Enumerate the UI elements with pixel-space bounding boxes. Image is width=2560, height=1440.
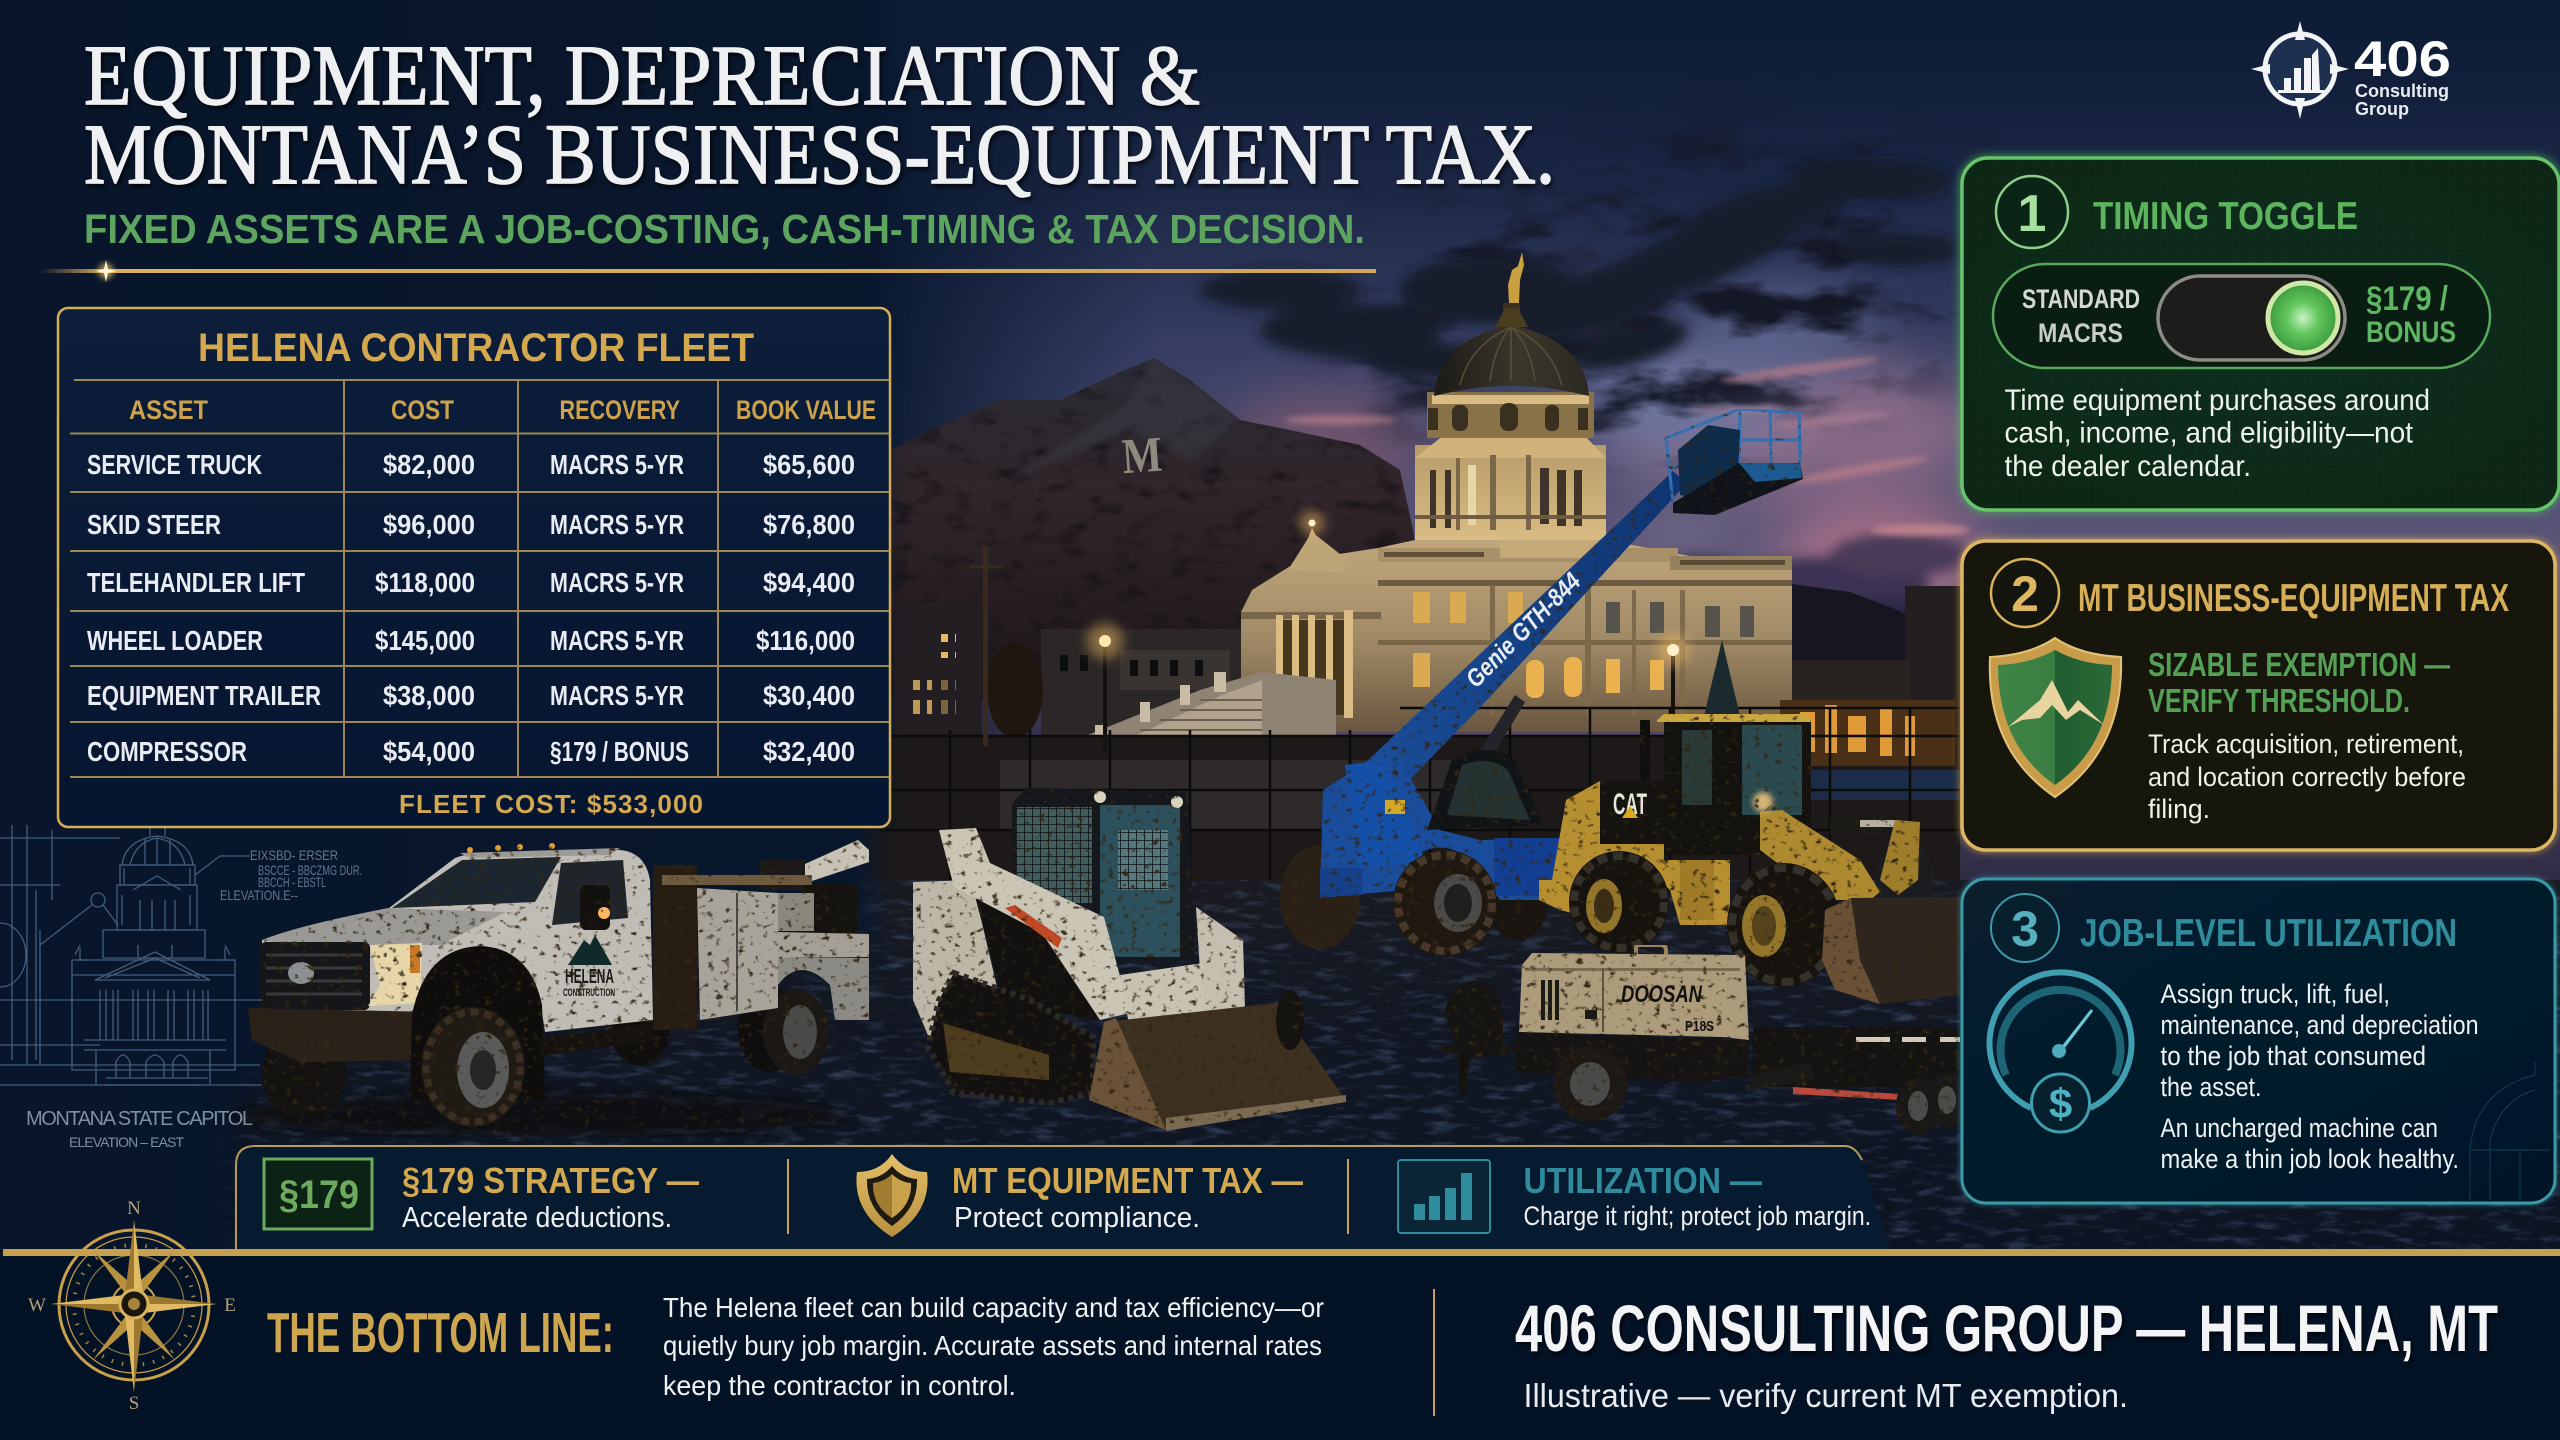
toggle control: STANDARD (2022, 284, 2140, 314)
table row: equipment trailer: EQUIPMENT TRAILER (87, 680, 321, 711)
item: MT equipment tax: Protect compliance. (954, 1202, 1200, 1234)
number badge 3: 3 (2011, 901, 2039, 957)
title (84, 27, 1555, 202)
body (1320, 757, 1560, 900)
blueprint annotations: BBCCH - EBSTL (258, 874, 326, 890)
basket (1666, 409, 1800, 503)
body text (2004, 384, 2430, 483)
table row: telehandler lift: $118,000 (375, 567, 475, 598)
body text: the dealer calendar. (2004, 450, 2251, 483)
icon: gold compass rose (28, 1198, 236, 1414)
item: MT equipment tax: MT EQUIPMENT TAX — (952, 1160, 1303, 1201)
table header row (129, 395, 876, 425)
blueprint caption: MONTANA STATE CAPITOL (26, 1108, 253, 1130)
mountains (1792, 584, 1905, 660)
handle (1636, 945, 1666, 956)
crane (785, 840, 869, 885)
logo: 406 Consulting Group (2251, 21, 2451, 119)
table row: wheel loader: MACRS 5-YR (550, 625, 684, 656)
callout: VERIFY THRESHOLD. (2148, 682, 2410, 719)
item: MT equipment tax (856, 1154, 1303, 1237)
table row: equipment trailer: $30,400 (763, 680, 855, 711)
subtitle: FIXED ASSETS ARE A JOB-COSTING, CASH-TIMING & TAX DECISION. (84, 206, 1365, 252)
heading: TIMING TOGGLE (2093, 195, 2358, 238)
rear wheels (610, 995, 670, 1065)
truck door logo: HELENA (565, 966, 614, 988)
tires (1569, 851, 1669, 953)
wet ground (200, 880, 2560, 1260)
number badge 3 (1991, 894, 2059, 962)
item: §179 strategy (264, 1159, 699, 1234)
chassis (1515, 1032, 1749, 1082)
toggle control: §179 / (2366, 280, 2448, 318)
blueprint annotations (220, 847, 362, 903)
toggle control: BONUS (2366, 316, 2456, 349)
body text: Time equipment purchases around (2004, 384, 2430, 417)
the bottom line heading: THE BOTTOM LINE: (267, 1301, 614, 1365)
table row: compressor: $54,000 (383, 736, 475, 767)
bottom line body: The Helena fleet can build capacity and tax efficiency—or (663, 1292, 1324, 1323)
body text: and location correctly before (2148, 762, 2466, 792)
body text: filing. (2148, 794, 2210, 824)
panel: Helena contractor fleet table (58, 308, 890, 827)
wheel arch (410, 946, 545, 1100)
gold rule with sparkle (40, 260, 1376, 282)
bucket (1822, 897, 1961, 1004)
table row: service truck: MACRS 5-YR (550, 449, 684, 480)
housing (1519, 953, 1749, 1040)
body text: Assign truck, lift, fuel, (2160, 979, 2390, 1009)
cab (1427, 750, 1543, 830)
406 Consulting Group sign-off: Illustrative — verify current MT exemption. (1524, 1377, 2128, 1414)
item: §179 strategy: §179 (279, 1173, 359, 1217)
front tire (421, 1007, 525, 1127)
toggle control: MACRS (2038, 318, 2123, 348)
bucket (1089, 1003, 1346, 1130)
table grid (70, 380, 890, 777)
loader arm (1760, 810, 1880, 900)
CAT logo (1613, 788, 1647, 821)
icon: mountain shield (1990, 638, 2121, 797)
toggle control (1993, 264, 2490, 368)
logo: 406 Consulting Group: 406 (2354, 31, 2451, 87)
table row: telehandler lift: MACRS 5-YR (550, 567, 684, 598)
table row: skid steer: SKID STEER (87, 509, 221, 540)
front tire (1393, 850, 1497, 956)
title: EQUIPMENT, DEPRECIATION & (84, 27, 1200, 123)
icon: gold compass rose: E (224, 1295, 236, 1316)
boom label: Genie GTH-844 (1460, 567, 1586, 693)
M on mountain: M (1120, 426, 1164, 484)
service truck (230, 840, 869, 1137)
blueprint annotations: ELEVATION.E-- (220, 887, 298, 903)
body text: maintenance, and depreciation (2160, 1010, 2478, 1040)
logo: 406 Consulting Group: Group (2355, 99, 2409, 119)
table row: wheel loader: $116,000 (756, 625, 855, 656)
body text: the asset. (2160, 1072, 2262, 1102)
table row: equipment trailer: $38,000 (383, 680, 475, 711)
lower body (1120, 963, 1205, 1030)
body text: to the job that consumed (2160, 1041, 2426, 1071)
table row: telehandler lift: TELEHANDLER LIFT (87, 567, 305, 598)
compressor and trailer (1441, 945, 1967, 1135)
inner front tire (262, 1027, 346, 1119)
table row: equipment trailer (87, 680, 855, 711)
stairs and foreground wall (860, 640, 1960, 886)
track (928, 973, 1093, 1103)
wheel loader (1539, 714, 1961, 1004)
table row: telehandler lift: $94,400 (763, 567, 855, 598)
table row: wheel loader: $145,000 (375, 625, 475, 656)
cab (1012, 788, 1195, 960)
blueprint annotations: EIXSBD- ERSER (250, 847, 338, 863)
tires (1280, 845, 1360, 949)
table header row: ASSET (129, 395, 208, 425)
street lamps and utility pole (970, 511, 1689, 753)
callout (2148, 646, 2450, 719)
logo: 406 Consulting Group: Consulting (2355, 81, 2449, 101)
table row: skid steer: $76,800 (763, 509, 855, 540)
body text (2160, 979, 2478, 1174)
body text: An uncharged machine can (2160, 1113, 2438, 1143)
callout: SIZABLE EXEMPTION — (2148, 646, 2450, 683)
table row: service truck (87, 449, 855, 480)
cab and hood (262, 850, 653, 1032)
lift arm (939, 828, 1130, 1020)
table row: wheel loader: WHEEL LOADER (87, 625, 263, 656)
item: utilization (1398, 1160, 1871, 1233)
divider (1433, 1289, 1435, 1416)
bottom band (0, 1249, 2560, 1440)
icon: gold compass rose: N (127, 1198, 141, 1219)
table heading: HELENA CONTRACTOR FLEET (198, 326, 754, 370)
body text: make a thin job look healthy. (2160, 1144, 2459, 1174)
compressor markings: DOOSAN (1621, 981, 1703, 1008)
panel 1: timing toggle (1962, 158, 2559, 510)
table header row: RECOVERY (560, 395, 680, 425)
table header row: BOOK VALUE (736, 395, 876, 425)
icon: gold compass rose: S (129, 1393, 139, 1414)
body text: cash, income, and eligibility—not (2004, 416, 2414, 450)
truck door logo (563, 935, 615, 999)
item: utilization: Charge it right; protect job margin. (1524, 1201, 1871, 1231)
running board (539, 1024, 653, 1056)
utility body (653, 865, 697, 1030)
icon: gold compass rose: W (28, 1295, 46, 1316)
truck door logo: CONSTRUCTION (563, 987, 615, 999)
rear body (1539, 781, 1730, 925)
panel 3: job-level utilization (1962, 879, 2555, 1203)
fleet cost total: FLEET COST: $533,000 (399, 789, 703, 819)
number badge 1 (1996, 176, 2068, 248)
table row: skid steer: $96,000 (383, 509, 475, 540)
panel 2: MT business-equipment tax (1962, 541, 2555, 850)
CAT logo: CAT (1613, 788, 1647, 821)
capitol building (1241, 528, 1792, 732)
summary strip: three takeaways (236, 1146, 1890, 1252)
blueprint annotations: BSCCE - BBCZMG DUR. (258, 862, 362, 878)
capitol tower and dome (1415, 252, 1606, 540)
table header row: COST (391, 395, 454, 425)
blueprint: Montana State Capitol elevation (0, 818, 262, 1085)
bottom line body: quietly bury job margin. Accurate assets and internal rates (663, 1330, 1322, 1361)
table row: compressor (87, 736, 855, 767)
compressor markings: P18S (1685, 1018, 1714, 1035)
grille and headlight (260, 942, 370, 1010)
telehandler lift (1280, 409, 1803, 956)
compressor markings (1621, 981, 1714, 1035)
cab (1664, 720, 1811, 855)
table row: compressor: COMPRESSOR (87, 736, 247, 767)
table row: telehandler lift (87, 567, 855, 598)
table row: skid steer (87, 509, 855, 540)
body text (2148, 729, 2466, 824)
icon: gauge with dollar: $ (2049, 1080, 2072, 1127)
item: utilization: UTILIZATION — (1524, 1160, 1762, 1201)
table row: compressor: $32,400 (763, 736, 855, 767)
table row: skid steer: MACRS 5-YR (550, 509, 684, 540)
number badge 1: 1 (2018, 185, 2046, 243)
title: MONTANA’S BUSINESS-EQUIPMENT TAX. (84, 106, 1555, 202)
number badge 2 (1991, 559, 2059, 627)
number badge 2: 2 (2011, 566, 2039, 622)
bottom line body: keep the contractor in control. (663, 1370, 1016, 1401)
blueprint caption: ELEVATION – EAST (69, 1134, 184, 1150)
interior gap (972, 885, 1100, 1020)
heading: JOB-LEVEL UTILIZATION (2080, 912, 2457, 955)
table row: service truck: SERVICE TRUCK (87, 449, 262, 480)
table row: compressor: §179 / BONUS (550, 736, 689, 767)
background city buildings (894, 586, 1960, 735)
bumper (248, 1008, 436, 1062)
mirror (580, 885, 610, 930)
icon: gauge with dollar (1989, 972, 2131, 1132)
table row: wheel loader (87, 625, 855, 656)
406 Consulting Group sign-off (1515, 1291, 2498, 1414)
body text: Track acquisition, retirement, (2148, 729, 2464, 759)
bottom line body (663, 1292, 1324, 1401)
table row: service truck: $65,600 (763, 449, 855, 480)
table row: service truck: $82,000 (383, 449, 475, 480)
item: §179 strategy: §179 STRATEGY — (402, 1160, 699, 1201)
watermark: dome sketch (2470, 1062, 2550, 1200)
rear body right (1196, 907, 1245, 1020)
skid steer (913, 788, 1346, 1131)
trailer (1753, 1027, 1961, 1087)
item: §179 strategy: Accelerate deductions. (402, 1202, 672, 1234)
blueprint caption (26, 1108, 253, 1150)
table row: equipment trailer: MACRS 5-YR (550, 680, 684, 711)
